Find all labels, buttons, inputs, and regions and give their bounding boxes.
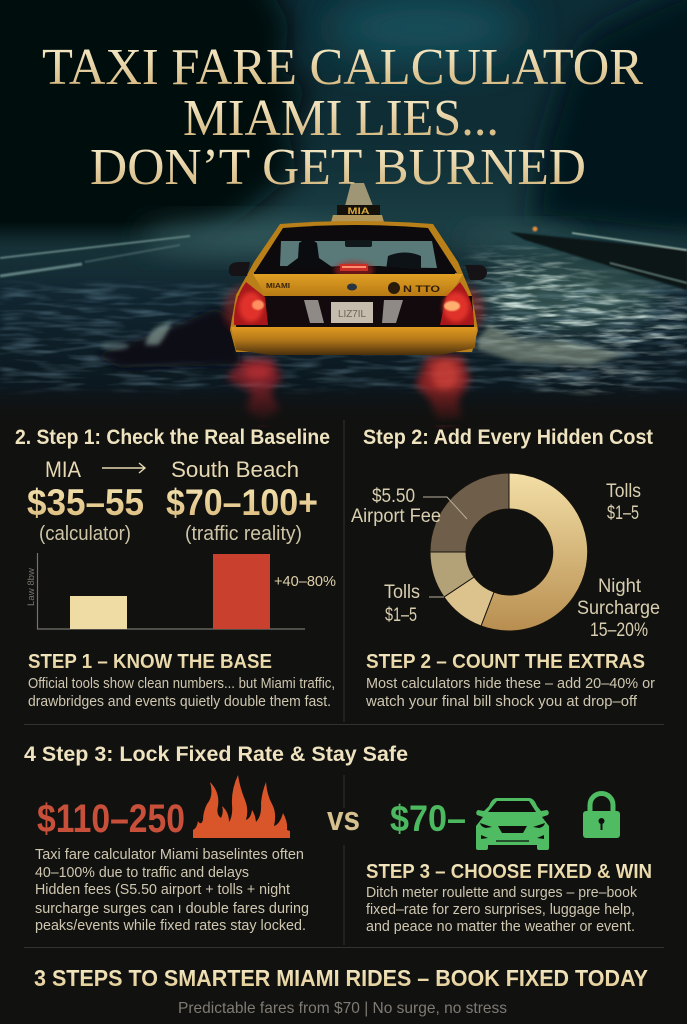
icon: car: [476, 798, 549, 850]
heading: step 1: 2. Step 1: Check the Real Baseline: [15, 426, 330, 449]
step 3 text: [366, 861, 652, 935]
bar chart: [26, 553, 336, 629]
taxi roof sign: MIA: [348, 206, 370, 216]
hero: rainy night road with taxi: [0, 0, 687, 428]
icon: flames: [193, 775, 290, 838]
price captions: (calculator): [39, 523, 131, 545]
bumper: [231, 327, 477, 355]
guard rail left: [0, 236, 190, 276]
heading: step 2: Step 2: Add Every Hidden Cost: [363, 426, 653, 449]
donut labels: $1–5: [385, 605, 417, 626]
licence plate and lamps: [304, 300, 403, 323]
step 3 text: Ditch meter roulette and surges – pre–book: [366, 884, 637, 901]
vs label: vs: [327, 800, 360, 838]
step 1 text: [28, 650, 335, 710]
donut labels: Tolls: [606, 481, 641, 502]
leader lines: [423, 497, 467, 597]
footer call to action: [34, 965, 648, 1017]
title: TAXI FARE CALCULATOR: [42, 39, 643, 96]
spray: [95, 308, 240, 368]
left body text: Hidden fees (S5.50 airport + tolls + night: [35, 881, 291, 898]
donut labels: Tolls: [384, 582, 420, 603]
step 2 text: Most calculators hide these – add 20–40% or: [366, 675, 655, 692]
title: [42, 39, 643, 196]
price captions: [39, 523, 302, 545]
brake light: [334, 261, 374, 279]
taxi: MIAMI: [266, 283, 290, 290]
tail lights: [234, 282, 474, 325]
footer call to action: 3 STEPS TO SMARTER MIAMI RIDES – BOOK FIXED TODAY: [34, 965, 648, 991]
left body text: 40–100% due to traffic and delays: [35, 864, 249, 881]
donut chart: [430, 473, 588, 631]
step 2 text: [365, 650, 655, 710]
step 2 text: STEP 2 – COUNT THE EXTRAS: [366, 650, 645, 673]
bar chart: +40–80%: [274, 573, 336, 590]
title: MIAMI LIES...: [183, 90, 499, 147]
footer tagline: Predictable fares from $70 | No surge, no stress: [178, 1000, 507, 1017]
passenger silhouette: [286, 240, 332, 267]
rear window: [254, 225, 457, 273]
panel: step 2 hidden costs: [351, 426, 660, 710]
donut labels: $1–5: [607, 503, 639, 524]
heading: step 3: 4 Step 3: Lock Fixed Rate & Stay Safe: [24, 743, 408, 766]
panel: step 1 baseline: [15, 426, 336, 710]
trunk: [253, 274, 463, 296]
step 3 text: STEP 3 – CHOOSE FIXED & WIN: [366, 861, 652, 883]
left body text: Taxi fare calculator Miami baselintes often: [35, 846, 304, 863]
prices: [27, 482, 318, 523]
donut labels: Airport Fee: [351, 506, 441, 527]
side mirrors: [229, 262, 250, 276]
red reflections: [226, 356, 470, 424]
guard rail right: [510, 226, 687, 290]
panel: step 3 fixed rate: [24, 743, 652, 945]
price captions: (traffic reality): [185, 523, 302, 545]
fixed price: $70–: [390, 798, 466, 839]
step 1 text: Official tools show clean numbers... but Miami traffic,: [28, 675, 335, 692]
left body text: peaks/events while fixed rates stay locked.: [35, 917, 306, 934]
bar chart: Law 8bw: [26, 567, 36, 606]
prices: $70–100+: [166, 482, 318, 523]
icon: padlock: [583, 794, 620, 838]
donut labels: Surcharge: [577, 598, 660, 619]
prices: $35–55: [27, 482, 144, 523]
title: DON’T GET BURNED: [90, 139, 586, 196]
licence plate and lamps: LIZ7IL: [338, 309, 366, 320]
taxi roof sign: [331, 183, 384, 222]
step 3 text: fixed–rate for zero surprises, luggage help,: [366, 901, 635, 918]
route labels: South Beach: [171, 457, 299, 482]
mirror: [345, 240, 372, 247]
left body text: surcharge surges can ı double fares during: [35, 900, 309, 917]
surge price: $110–250: [37, 797, 185, 841]
step 1 text: drawbridges and events quietly double them fast.: [28, 693, 331, 710]
donut labels: [351, 481, 660, 641]
donut labels: $5.50: [372, 486, 415, 507]
seat: [386, 252, 421, 270]
shelf: [254, 266, 455, 274]
route labels: [45, 457, 299, 482]
car body: [230, 221, 478, 352]
donut labels: 15–20%: [590, 620, 648, 641]
step 2 text: watch your final bill shock you at drop–off: [365, 693, 638, 710]
route labels: MIA: [45, 457, 81, 482]
black band: [236, 296, 474, 327]
left body text: [35, 846, 309, 934]
step 3 text: and peace no matter the weather or event.: [366, 918, 635, 935]
taxi: [224, 183, 487, 355]
step 1 text: STEP 1 – KNOW THE BASE: [28, 650, 272, 673]
donut labels: Night: [598, 576, 642, 597]
tail light glow: [224, 284, 276, 336]
taxi: N TTO: [403, 284, 440, 294]
